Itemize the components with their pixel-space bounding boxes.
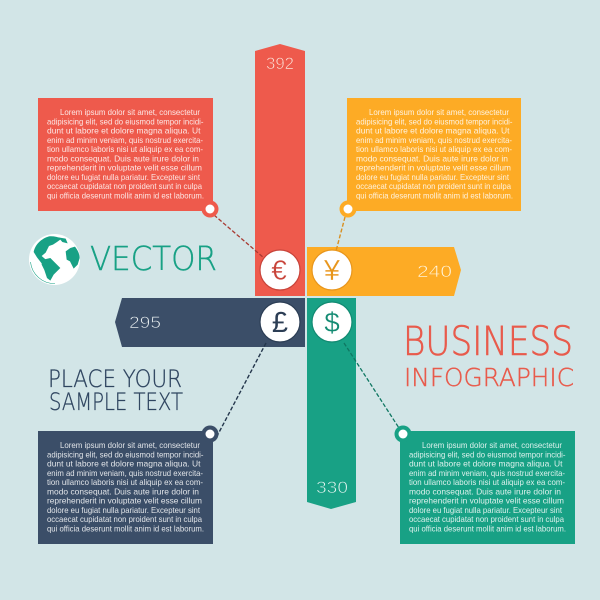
bar: red 392: 392 <box>266 54 294 73</box>
panel: yellow text box: qui officia deserunt mollit anim id est laborum. <box>356 190 513 200</box>
heading: INFOGRAPHIC: INFOGRAPHIC <box>404 363 574 392</box>
panel: yellow text box: adipisicing elit, sed do eiusmod tempor incidi- <box>356 116 513 126</box>
bar: navy 295: 295 <box>129 313 161 332</box>
panel: red text box: occaecat cupidatat non proident sunt in culpa <box>47 181 202 191</box>
heading: PLACE YOUR: PLACE YOUR <box>48 365 182 393</box>
connector: green <box>344 343 399 428</box>
panel: red text box: Lorem ipsum dolor sit amet, consectetur <box>60 107 200 117</box>
bar: yellow 240 <box>307 247 461 296</box>
bar: green 330 <box>307 298 356 509</box>
panel: navy text box <box>38 431 213 544</box>
panel: red text box: dolore eu fugiat nulla pariatur. Excepteur sint <box>47 172 201 182</box>
panel: red text box: adipisicing elit, sed do eiusmod tempor incidi- <box>47 116 204 126</box>
panel: yellow text box: occaecat cupidatat non proident sunt in culpa <box>356 181 511 191</box>
panel: navy text box: enim ad minim veniam, quis nostrud exercita- <box>47 468 203 478</box>
panel: navy text box: qui officia deserunt mollit anim id est laborum. <box>47 523 204 533</box>
panel: yellow text box: enim ad minim veniam, quis nostrud exercita- <box>356 135 512 145</box>
icon: pound: £ <box>272 307 288 339</box>
panel: green text box <box>400 431 575 544</box>
panel: green text box: occaecat cupidatat non proident sunt in culpa <box>409 514 564 524</box>
panel: red text box <box>38 98 213 211</box>
panel: green text box: reprehenderit in voluptate velit esse cillum <box>409 496 564 506</box>
heading: VECTOR: VECTOR <box>90 239 217 278</box>
connector: yellow <box>336 217 345 251</box>
panel: yellow text box: dunt ut labore et dolore magna aliqua. Ut <box>356 126 510 136</box>
panel: navy text box: dunt ut labore et dolore magna aliqua. Ut <box>47 458 201 468</box>
panel: red text box: tion ullamco laboris nisi ut aliquip ex ea com- <box>47 144 203 154</box>
marker: navy dot <box>202 426 218 442</box>
connector: navy <box>215 343 266 440</box>
panel: red text box: enim ad minim veniam, quis nostrud exercita- <box>47 135 203 145</box>
panel: navy text box: reprehenderit in voluptate velit esse cillum <box>47 496 202 506</box>
panel: navy text box: adipisicing elit, sed do eiusmod tempor incidi- <box>47 449 204 459</box>
bar: navy 295 <box>115 298 305 347</box>
panel: yellow text box: tion ullamco laboris nisi ut aliquip ex ea com- <box>356 144 512 154</box>
icon: dollar <box>312 302 352 342</box>
panel: red text box: reprehenderit in voluptate velit esse cillum <box>47 162 202 172</box>
icon: yen: ¥ <box>323 255 341 287</box>
marker: green dot <box>394 426 412 442</box>
bar: red 392 <box>255 44 305 296</box>
marker: red dot <box>202 200 218 218</box>
panel: navy text box: tion ullamco laboris nisi ut aliquip ex ea com- <box>47 477 203 487</box>
panel: red text box: qui officia deserunt mollit anim id est laborum. <box>47 190 204 200</box>
bar: yellow 240: 240 <box>417 262 452 281</box>
panel: green text box: enim ad minim veniam, quis nostrud exercita- <box>409 468 565 478</box>
panel: yellow text box: reprehenderit in voluptate velit esse cillum <box>356 162 511 172</box>
panel: green text box: tion ullamco laboris nisi ut aliquip ex ea com- <box>409 477 565 487</box>
panel: navy text box: modo consequat. Duis aute irure dolor in <box>47 486 199 496</box>
panel: navy text box: dolore eu fugiat nulla pariatur. Excepteur sint <box>47 505 201 515</box>
panel: navy text box: occaecat cupidatat non proident sunt in culpa <box>47 514 202 524</box>
panel: green text box: adipisicing elit, sed do eiusmod tempor incidi- <box>409 449 566 459</box>
icon: euro <box>260 250 300 290</box>
icon: globe <box>29 234 80 285</box>
heading: SAMPLE TEXT: SAMPLE TEXT <box>49 388 183 416</box>
marker: yellow dot <box>340 200 356 218</box>
panel: green text box: qui officia deserunt mollit anim id est laborum. <box>409 523 566 533</box>
panel: red text box: dunt ut labore et dolore magna aliqua. Ut <box>47 126 201 136</box>
panel: red text box: modo consequat. Duis aute irure dolor in <box>47 153 199 163</box>
bar: green 330: 330 <box>316 478 348 497</box>
icon: euro: € <box>271 254 287 286</box>
panel: green text box: dolore eu fugiat nulla pariatur. Excepteur sint <box>409 505 563 515</box>
icon: pound <box>260 302 300 342</box>
panel: yellow text box: dolore eu fugiat nulla pariatur. Excepteur sint <box>356 172 510 182</box>
heading: BUSINESS: BUSINESS <box>403 319 573 365</box>
connector: red <box>214 215 264 258</box>
panel: yellow text box <box>347 98 521 211</box>
panel: green text box: dunt ut labore et dolore magna aliqua. Ut <box>409 458 563 468</box>
icon: dollar: $ <box>324 307 340 338</box>
panel: green text box: modo consequat. Duis aute irure dolor in <box>409 486 561 496</box>
icon: yen <box>312 250 352 290</box>
panel: navy text box: Lorem ipsum dolor sit amet, consectetur <box>60 440 200 450</box>
panel: yellow text box: modo consequat. Duis aute irure dolor in <box>356 153 508 163</box>
panel: yellow text box: Lorem ipsum dolor sit amet, consectetur <box>369 107 509 117</box>
panel: green text box: Lorem ipsum dolor sit amet, consectetur <box>422 440 562 450</box>
